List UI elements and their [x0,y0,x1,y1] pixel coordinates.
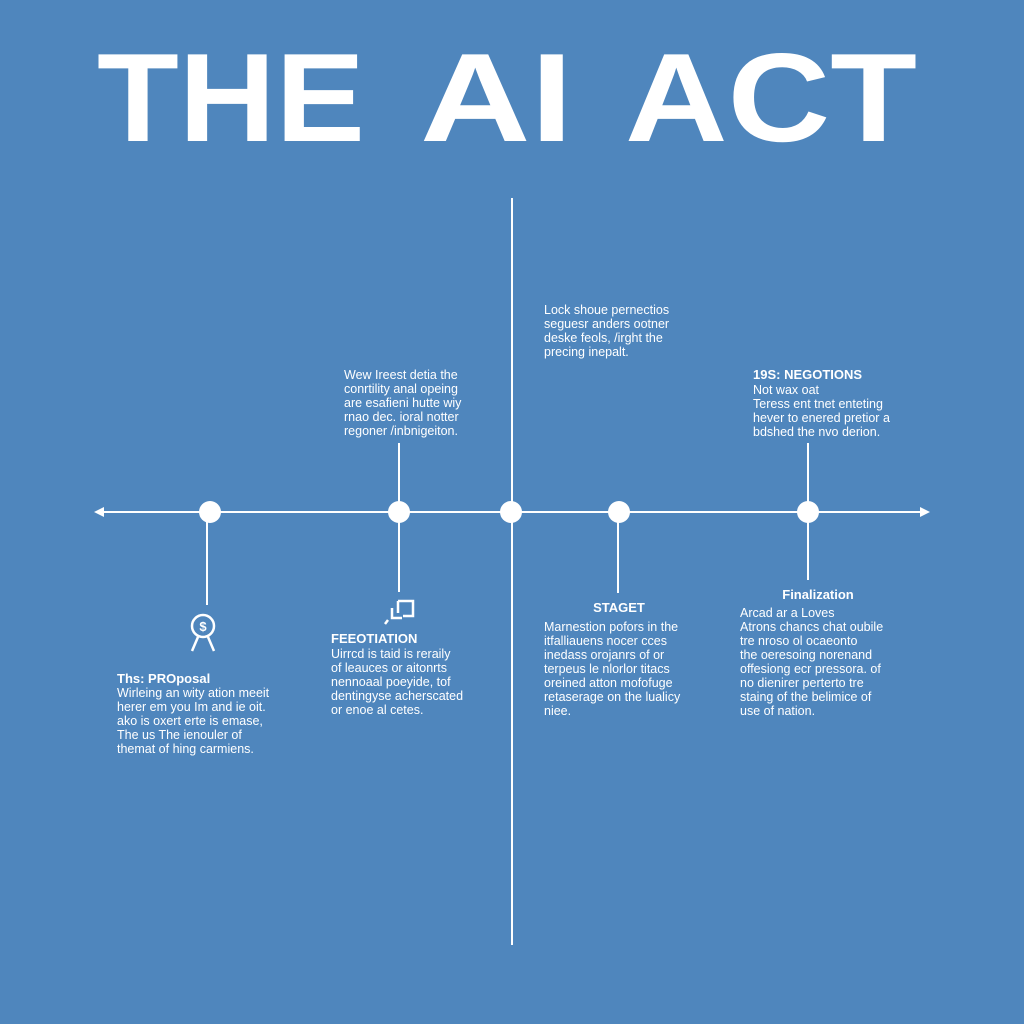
panel: proposal: themat of hing carmiens. [117,742,254,756]
panel: finalization: tre nroso ol ocaeonto [740,634,857,648]
title: ACT [625,27,917,168]
title: AI [420,27,573,168]
timeline nodes [199,501,819,523]
icon: negotiation document [385,601,413,624]
panel: negotiation [331,631,463,717]
text block: above node 2 [344,368,462,438]
panel: finalization: offesiong ecr pressora. of [740,662,881,676]
text block: above node 2: Wew Ireest detia the [344,368,458,382]
text block: above node 2: conrtility anal opeing [344,382,458,396]
title: THE [97,27,365,168]
panel: finalization: the oeresoing norenand [740,648,872,662]
panel: negotiations: Teress ent tnet enteting [753,397,883,411]
title [97,27,917,168]
panel: negotiations: 19S: NEGOTIONS [753,367,862,382]
text block: top middle: precing inepalt. [544,345,629,359]
panel: proposal [117,671,270,756]
panel: finalization: use of nation. [740,704,815,718]
text block: top middle: deske feols, /irght the [544,331,663,345]
panel: negotiations: hever to enered pretior a [753,411,890,425]
panel: finalization: Arcad ar a Loves [740,606,834,620]
panel: negotiation: dentingyse acherscated [331,689,463,703]
panel: negotiations: bdshed the nvo derion. [753,425,880,439]
panel: finalization: Atrons chancs chat oubile [740,620,883,634]
panel: stage: inedass orojanrs of or [544,648,664,662]
panel: proposal: The us The ienouler of [117,728,242,742]
panel: stage: retaserage on the lualicy [544,690,681,704]
text block: top middle: seguesr anders ootner [544,317,669,331]
panel: stage: niee. [544,704,571,718]
vertical axis line [511,198,513,945]
panel: stage: STAGET [593,600,645,615]
text block: above node 2: are esafieni hutte wiy [344,396,462,410]
panel: negotiations [753,367,890,439]
panel: negotiations: Not wax oat [753,383,820,397]
panel: negotiation: or enoe al cetes. [331,703,423,717]
timeline axis with arrows [94,507,930,517]
panel: proposal: ako is oxert erte is emase, [117,714,263,728]
text block: above node 2: rnao dec. ioral notter [344,410,459,424]
panel: stage: terpeus le nlorlor titacs [544,662,670,676]
panel: negotiation: nennoaal poeyide, tof [331,675,451,689]
icon: proposal badge: $ [199,619,207,634]
panel: negotiation: Uirrcd is taid is reraily [331,647,451,661]
connectors [207,443,808,605]
panel: stage: Marnestion pofors in the [544,620,678,634]
icon: proposal badge [192,615,214,651]
panel: finalization: staing of the belimice of [740,690,872,704]
panel: finalization: Finalization [782,587,854,602]
panel: finalization [740,587,883,718]
panel: negotiation: of leauces or aitonrts [331,661,447,675]
panel: proposal: Wirleing an wity ation meeit [117,686,270,700]
panel: stage [544,600,681,718]
panel: proposal: Ths: PROposal [117,671,210,686]
text block: above node 2: regoner /inbnigeiton. [344,424,458,438]
panel: proposal: herer em you Im and ie oit. [117,700,266,714]
panel: stage: oreined atton mofofuge [544,676,673,690]
panel: stage: itfalliauens nocer cces [544,634,667,648]
panel: negotiation: FEEOTIATION [331,631,417,646]
panel: finalization: no dienirer perterto tre [740,676,864,690]
text block: top middle: Lock shoue pernectios [544,303,669,317]
text block: top middle [544,303,669,359]
